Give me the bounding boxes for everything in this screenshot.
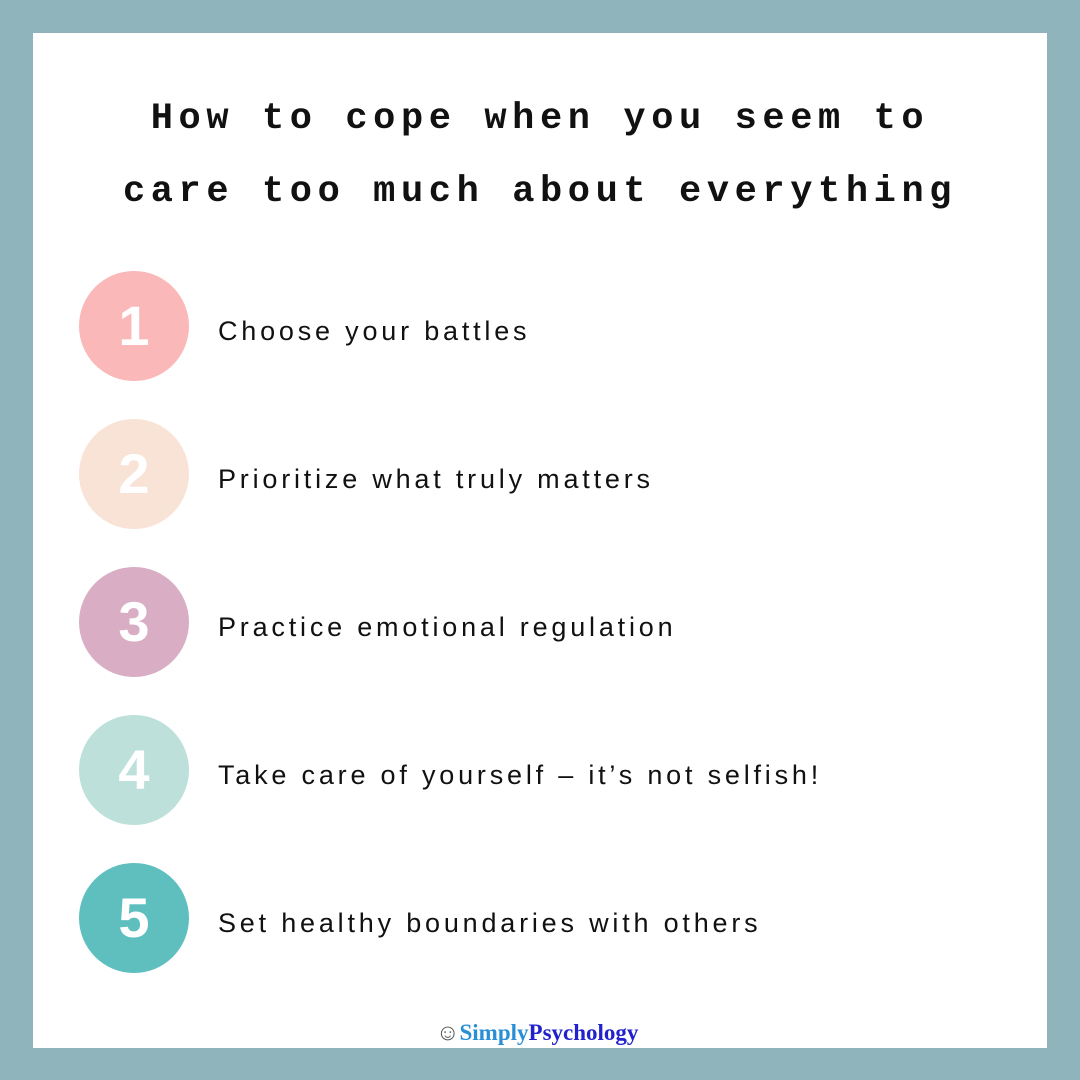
item 4: Take care of yourself – it’s not selfish! xyxy=(218,760,822,790)
title: care too much about everything xyxy=(123,171,957,213)
item 4: 4 xyxy=(118,738,150,801)
item 3: 3 xyxy=(118,590,150,653)
logo: ☺SimplyPsychology xyxy=(436,1020,638,1045)
item 1 xyxy=(79,271,530,381)
item 3 xyxy=(79,567,676,677)
title xyxy=(123,98,957,213)
item 5: 5 xyxy=(118,886,150,949)
item 3: Practice emotional regulation xyxy=(218,612,676,642)
item 5 xyxy=(79,863,761,973)
title: How to cope when you seem to xyxy=(151,98,929,140)
item 2: 2 xyxy=(118,442,150,505)
item 4 xyxy=(79,715,822,825)
item 2 xyxy=(79,419,654,529)
item 1: Choose your battles xyxy=(218,316,530,346)
item 5: Set healthy boundaries with others xyxy=(218,908,761,938)
item 2: Prioritize what truly matters xyxy=(218,464,654,494)
item 1: 1 xyxy=(118,294,150,357)
